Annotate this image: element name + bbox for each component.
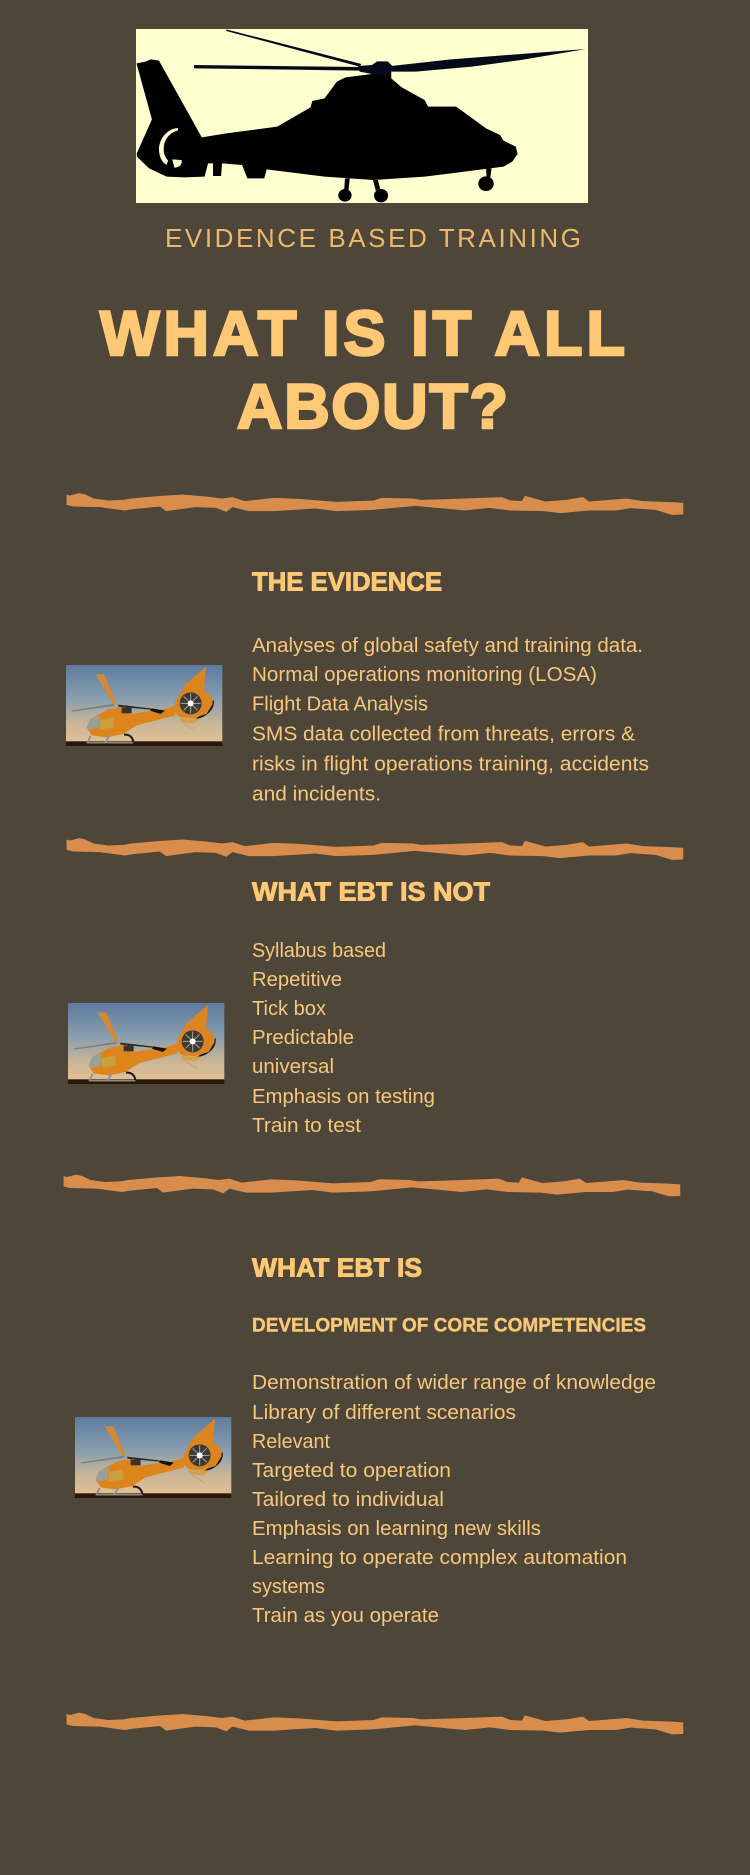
text block: is list: Targeted to operation — [252, 1460, 451, 1482]
text block: is list — [252, 1372, 656, 1627]
icon: tail fan gap — [159, 128, 182, 168]
text block: evidence list: risks in flight operations training, accidents — [252, 754, 649, 776]
subtitle: EVIDENCE BASED TRAINING — [165, 223, 581, 253]
subheading: core competencies: DEVELOPMENT OF CORE COMPETENCIES — [252, 1314, 646, 1336]
heading: the evidence: THE EVIDENCE — [252, 566, 442, 596]
text block: is list: Tailored to individual — [252, 1489, 444, 1511]
heading: what EBT is not: WHAT EBT IS NOT — [252, 876, 490, 906]
panel: the evidence — [66, 566, 649, 806]
text block: is list: Demonstration of wider range of knowledge — [252, 1372, 656, 1394]
icon: orange helicopter — [75, 1417, 231, 1498]
icon: orange helicopter — [68, 1003, 224, 1084]
text block: is list: systems — [252, 1576, 325, 1598]
divider 3 — [64, 1175, 680, 1196]
icon: main rotor — [194, 29, 586, 75]
text block: not list: universal — [252, 1056, 334, 1078]
icon: landing gear — [344, 168, 492, 191]
icon: orange helicopter — [66, 665, 222, 746]
text block: not list: Syllabus based — [252, 940, 386, 962]
icon: helicopter body — [136, 59, 518, 180]
text block: evidence list: Flight Data Analysis — [252, 694, 428, 716]
text block: evidence list: SMS data collected from threats, errors & — [252, 724, 636, 746]
divider 2 — [67, 838, 683, 860]
title: WHAT IS IT ALL — [100, 299, 625, 369]
text block: not list: Train to test — [252, 1115, 361, 1137]
title — [100, 299, 625, 442]
divider 4 — [67, 1713, 683, 1734]
text block: is list: Relevant — [252, 1431, 330, 1453]
header image: helicopter silhouette — [136, 29, 588, 203]
panel: what EBT is not — [68, 876, 490, 1137]
text block: not list: Tick box — [252, 998, 326, 1020]
text block: is list: Learning to operate complex automation — [252, 1547, 627, 1569]
text block: not list: Predictable — [252, 1027, 354, 1049]
title: ABOUT? — [237, 372, 508, 442]
heading: what EBT is: WHAT EBT IS — [252, 1252, 422, 1282]
text block: not list — [252, 940, 435, 1137]
divider 1 — [67, 493, 683, 515]
text block: evidence list: and incidents. — [252, 784, 381, 806]
text block: is list: Library of different scenarios — [252, 1402, 516, 1424]
text block: is list: Emphasis on learning new skills — [252, 1518, 541, 1540]
text block: evidence list: Normal operations monitoring (LOSA) — [252, 664, 597, 686]
panel: what EBT is — [75, 1252, 656, 1627]
text block: evidence list — [252, 635, 649, 806]
text block: is list: Train as you operate — [252, 1605, 439, 1627]
text block: not list: Emphasis on testing — [252, 1086, 435, 1108]
text block: evidence list: Analyses of global safety and training data. — [252, 635, 643, 657]
text block: not list: Repetitive — [252, 969, 342, 991]
